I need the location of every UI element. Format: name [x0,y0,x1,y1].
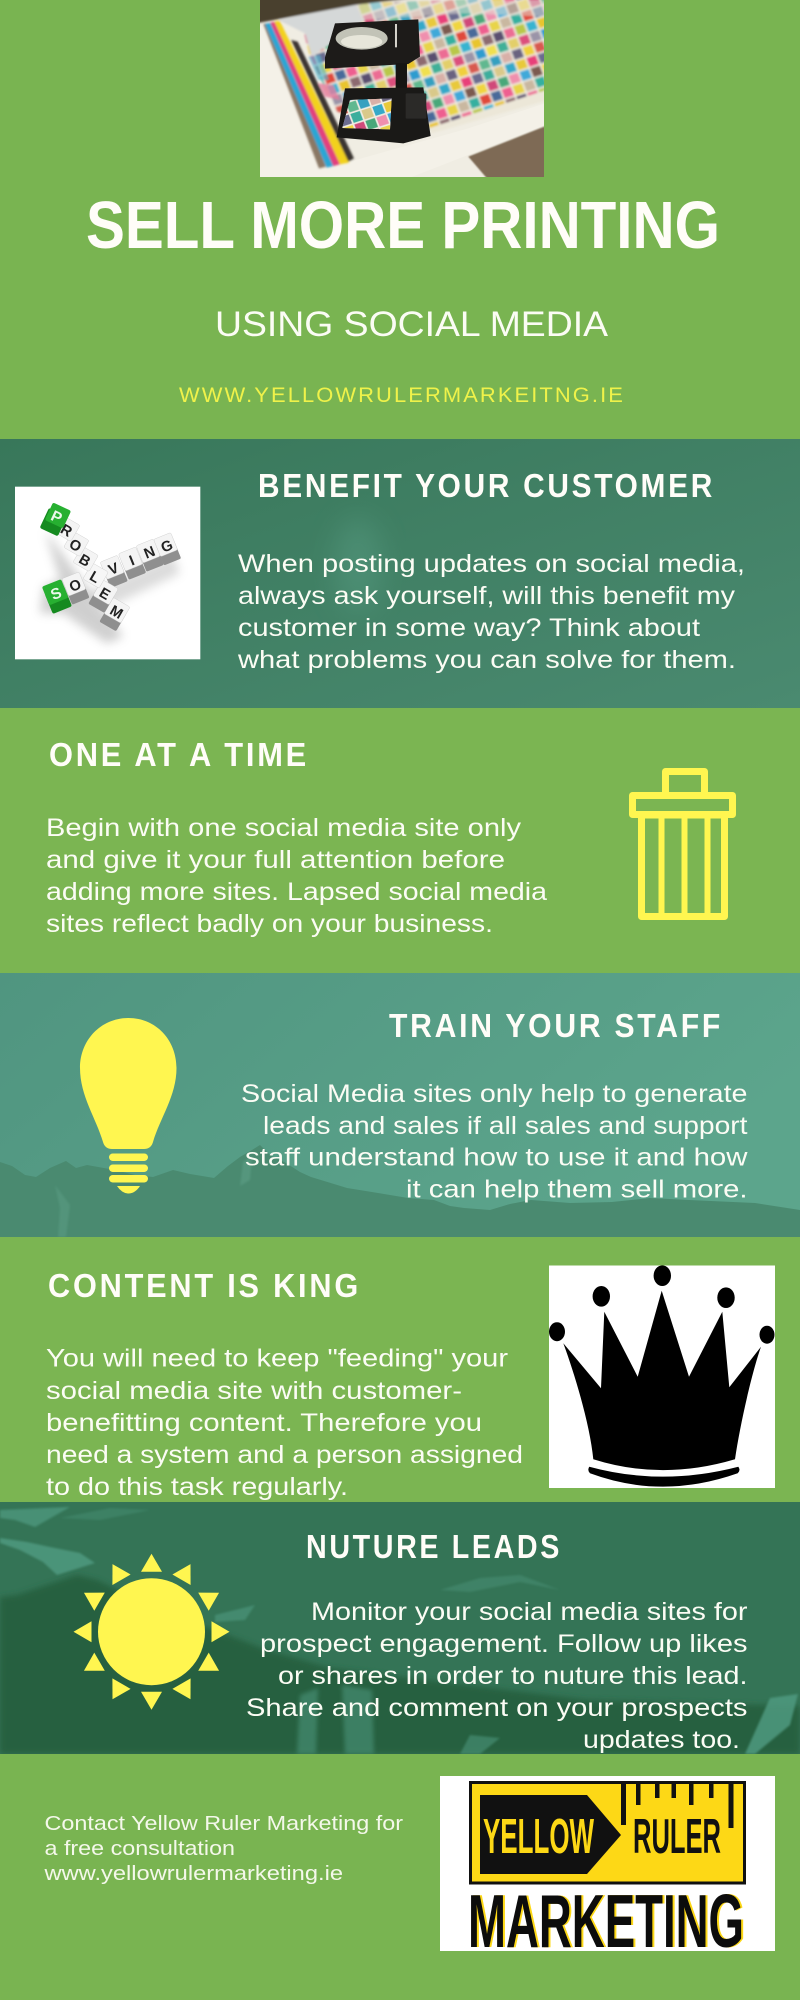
body text [237,550,745,674]
body text: it can help them sell more. [406,1176,748,1204]
icon: trash can [632,772,732,916]
body text: prospect engagement. Follow up likes [260,1630,748,1658]
contact text: Contact Yellow Ruler Marketing for [44,1812,403,1835]
logo: yellow ruler marketing [440,1776,775,1963]
body text: Begin with one social media site only [46,814,522,842]
heading: NUTURE LEADS [306,1528,562,1565]
cubes: problem: M [107,603,125,623]
body text: benefitting content. Therefore you [46,1409,482,1437]
panel: train your staff [0,973,800,1237]
body text: adding more sites. Lapsed social media [46,878,547,906]
panel: benefit your customer [0,439,800,708]
body text [46,1344,523,1501]
cubes: solving: G [159,537,175,556]
body text: need a system and a person assigned [46,1441,523,1469]
heading: TRAIN YOUR STAFF [389,1007,723,1044]
contact text: a free consultation [44,1837,235,1860]
background mountains [0,1145,800,1237]
icon: light bulb [80,1018,176,1194]
panel: one at a time [0,708,800,973]
website url: WWW.YELLOWRULERMARKEITNG.IE [179,384,625,407]
body text: Share and comment on your prospects [246,1694,748,1722]
cubes: problem [99,597,130,631]
contact text [43,1812,403,1885]
logo: yellow ruler marketing: RULER [633,1810,721,1864]
body text: Social Media sites only help to generate [241,1080,748,1108]
body text: and give it your full attention before [46,846,505,874]
loupe body [325,19,431,143]
body text: social media site with customer- [46,1377,462,1405]
image: problem solving cubes: B [76,552,93,571]
panel: content is king [0,1237,800,1502]
image: problem solving cubes: O [67,577,84,596]
logo: yellow ruler marketing: YELLOW [483,1810,594,1864]
subtitle: USING SOCIAL MEDIA [215,305,609,344]
image: problem solving cubes: N [142,544,158,563]
body text: Monitor your social media sites for [311,1598,748,1626]
photo: print colour chart with loupe [252,0,555,180]
image: problem solving cubes: I [127,553,137,569]
body text: always ask yourself, will this benefit my [238,582,736,610]
icon: sun [74,1554,230,1710]
image: problem solving cubes: L [86,569,102,587]
contact text: www.yellowrulermarketing.ie [43,1862,343,1885]
image: problem solving cubes: S [48,584,64,604]
body text: leads and sales if all sales and support [263,1112,748,1140]
body text [46,814,547,938]
title: SELL MORE PRINTING [86,188,720,263]
body text: what problems you can solve for them. [237,646,736,674]
cubes: solving [153,533,181,565]
image: problem solving cubes [15,487,200,659]
body text [241,1080,749,1204]
body text: or shares in order to nuture this lead. [278,1662,748,1690]
body text [246,1598,748,1754]
heading: CONTENT IS KING [48,1267,361,1304]
image: problem solving cubes: P [48,508,65,527]
body text: sites reflect badly on your business. [46,910,493,938]
body text: to do this task regularly. [46,1473,348,1501]
body text: You will need to keep "feeding" your [46,1344,508,1372]
body text: updates too. [583,1726,740,1754]
body text: customer in some way? Think about [238,614,700,642]
body text: When posting updates on social media, [238,550,745,578]
panel: footer contact [0,1754,800,2000]
background forest texture [0,1507,800,1754]
image: problem solving cubes: V [106,560,122,579]
image: problem solving cubes: O [66,536,84,556]
heading: BENEFIT YOUR CUSTOMER [258,467,715,504]
image: black crown [549,1265,775,1488]
panel: nuture leads [0,1502,800,1754]
image: problem solving cubes: E [96,585,113,604]
heading: ONE AT A TIME [49,736,309,773]
body text: staff understand how to use it and how [245,1144,749,1172]
image: problem solving cubes: R [57,522,75,541]
